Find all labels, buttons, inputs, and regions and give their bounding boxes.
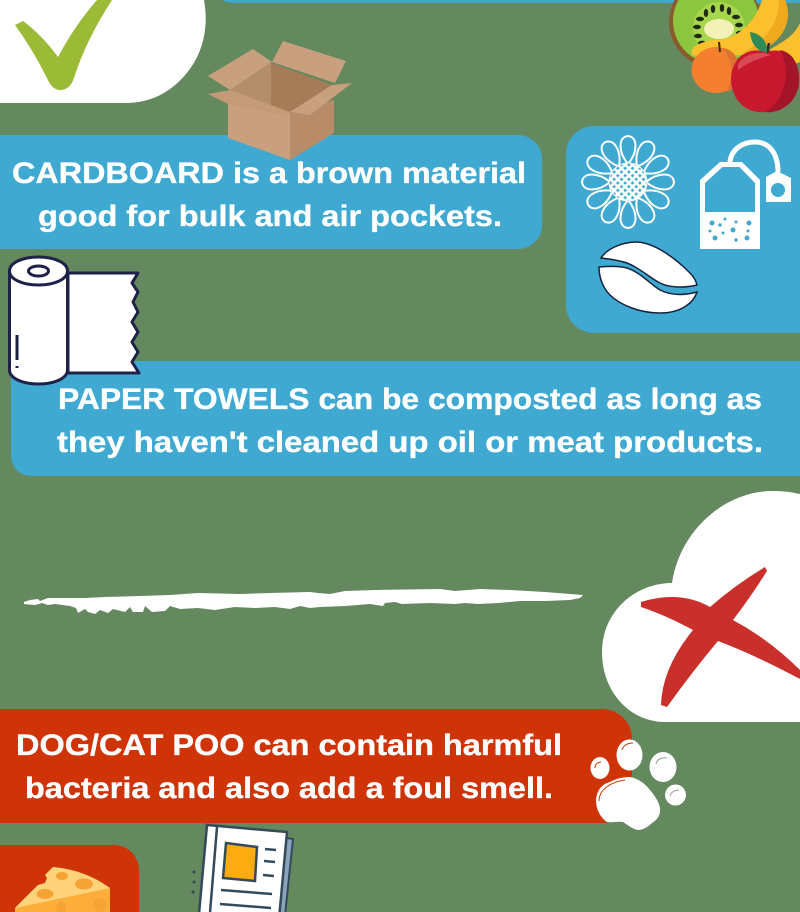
icon: newspaper	[192, 825, 293, 912]
apple	[731, 50, 799, 112]
icon: coffee bean	[599, 242, 697, 313]
icon: paper towel roll	[10, 257, 139, 384]
text: paper towels description: PAPER TOWELS can be composted as long as	[58, 383, 762, 416]
icon: paw print	[590, 740, 686, 830]
panel: cardboard	[0, 135, 542, 249]
text: cardboard description: CARDBOARD is a brown material	[12, 157, 526, 190]
icon: cheese wedge	[15, 867, 110, 912]
peach	[692, 47, 740, 93]
icon: tea bag	[700, 142, 791, 249]
decorative brush stroke divider	[24, 589, 583, 614]
leaf	[750, 32, 767, 53]
panel: white cloud with check mark	[0, 0, 206, 103]
icon: red X mark	[641, 567, 800, 707]
panel: compostable icons	[566, 126, 800, 333]
icon: cardboard box	[208, 41, 352, 160]
text: cardboard description	[12, 157, 526, 233]
panel: cheese	[0, 845, 139, 912]
panel: dog and cat poo	[0, 709, 632, 823]
kiwi	[669, 0, 761, 68]
panel: paper towels	[11, 361, 800, 476]
panel: top blue bar	[222, 0, 800, 3]
icon: green check mark	[15, 0, 112, 90]
text: paper towels description	[57, 383, 763, 459]
text: dog and cat poo description	[16, 729, 562, 805]
text: dog and cat poo description: DOG/CAT POO can contain harmful	[16, 729, 562, 762]
icon: fruit group	[669, 0, 800, 112]
bananas	[692, 0, 788, 57]
text: paper towels description: they haven't cleaned up oil or meat products.	[57, 426, 763, 459]
text: cardboard description: good for bulk and air pockets.	[38, 200, 502, 233]
text: dog and cat poo description: bacteria and also add a foul smell.	[25, 772, 553, 805]
panel: white cloud with X mark	[602, 491, 800, 722]
icon: sunflower	[582, 136, 674, 228]
